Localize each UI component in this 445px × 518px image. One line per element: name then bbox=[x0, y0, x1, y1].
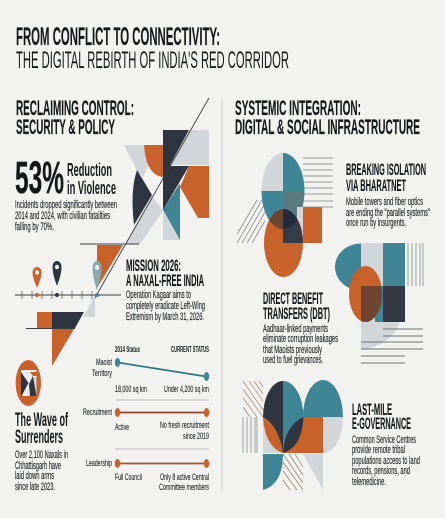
row: recruitment: since 2019 bbox=[183, 431, 209, 442]
row: leadership: Leadership bbox=[86, 458, 112, 469]
heading: systemic integration bbox=[235, 96, 420, 139]
row: maoist territory: 18,000 sq km bbox=[115, 384, 147, 395]
row: leadership: Only 8 active Central bbox=[160, 472, 209, 483]
panel: security and policy: RECLAIMING CONTROL: bbox=[16, 96, 134, 120]
row: maoist territory bbox=[92, 357, 209, 395]
block: direct benefit transfers bbox=[263, 290, 338, 366]
block: wave of surrenders: Chhattisgarh have bbox=[15, 460, 61, 472]
timeline with map pins bbox=[15, 261, 121, 299]
panel: digital and social infrastructure bbox=[232, 96, 430, 490]
row: recruitment bbox=[83, 407, 209, 442]
icon: blue-grey pin bbox=[92, 261, 102, 290]
text: violence details: 2014 and 2024, with civilian fatalities bbox=[15, 210, 110, 222]
block: wave of surrenders: since late 2023. bbox=[15, 481, 55, 493]
row: maoist territory: Under 4,200 sq km bbox=[164, 384, 209, 395]
block: direct benefit transfers: eliminate corruption leakages bbox=[263, 333, 338, 345]
heading: reclaiming control bbox=[16, 96, 134, 139]
block: last-mile e-governance: telemedicine. bbox=[352, 476, 386, 488]
panel: digital and social infrastructure: TRANSFERS (DBT) bbox=[263, 305, 330, 323]
block: wave of surrenders: laid down arms bbox=[15, 470, 54, 482]
row: leadership: Full Council bbox=[115, 472, 142, 483]
text: A NAXAL-FREE INDIA bbox=[126, 272, 204, 290]
text: violence details bbox=[15, 199, 117, 233]
row: maoist territory: Maoist bbox=[96, 357, 112, 368]
row: recruitment: Active bbox=[115, 422, 129, 433]
block: mission 2026 bbox=[126, 257, 205, 323]
chart: status comparison bbox=[83, 345, 209, 493]
illustration: lower geometric blocks bbox=[26, 297, 95, 366]
panel: security and policy bbox=[15, 96, 209, 493]
icon: surrender badge bbox=[16, 360, 41, 406]
chart headers: 2014 Status bbox=[115, 345, 140, 354]
stat: 53% reduction in violence: in Violence bbox=[67, 177, 116, 198]
block: mission 2026: MISSION 2026: bbox=[126, 257, 181, 275]
illustration: BharatNet collage bbox=[232, 153, 333, 277]
block: mission 2026: Operation Kagaar aims to bbox=[126, 289, 191, 301]
illustration: geometric collage bbox=[80, 98, 209, 317]
chart headers: CURRENT STATUS bbox=[171, 345, 209, 354]
block: direct benefit transfers: DIRECT BENEFIT bbox=[263, 290, 323, 308]
heading: reclaiming control: SECURITY & POLICY bbox=[16, 115, 115, 139]
row: leadership bbox=[86, 458, 209, 493]
illustration: DBT collage bbox=[335, 243, 423, 363]
block: BharatNet bbox=[346, 161, 430, 229]
block: wave of surrenders bbox=[15, 410, 68, 493]
block: mission 2026: completely eradicate Left-Wing bbox=[126, 300, 205, 312]
block: last-mile e-governance: LAST-MILE bbox=[352, 401, 392, 419]
stat: 53% reduction in violence: 53% bbox=[15, 152, 64, 203]
text: violence details: Incidents dropped significantly between bbox=[15, 199, 117, 211]
block: direct benefit transfers: Aadhaar-linked payments bbox=[263, 323, 328, 335]
stat: 53% reduction in violence: Reduction bbox=[67, 159, 112, 180]
row: leadership: Committee members bbox=[159, 482, 209, 493]
chart headers bbox=[115, 345, 209, 354]
block: direct benefit transfers: used to fuel grievances. bbox=[263, 354, 323, 366]
row: recruitment: Recruitment bbox=[83, 407, 112, 418]
row: maoist territory: Territory bbox=[92, 368, 112, 379]
illustration: e-governance collage bbox=[243, 380, 343, 490]
block: wave of surrenders: Surrenders bbox=[15, 427, 63, 448]
icon: dark pin bbox=[52, 261, 62, 286]
row: recruitment: No fresh recruitment bbox=[160, 420, 209, 431]
block: direct benefit transfers: that Maoists previously bbox=[263, 344, 322, 356]
icon: orange pin bbox=[32, 267, 42, 288]
panel: security and policy: The Wave of bbox=[15, 410, 68, 431]
block: last-mile e-governance bbox=[352, 401, 420, 488]
text: violence details: falling by 70%. bbox=[15, 221, 54, 233]
block: wave of surrenders: Over 2,100 Naxals in bbox=[15, 449, 68, 461]
title bbox=[16, 23, 289, 74]
block: mission 2026: Extremism by March 31, 2026. bbox=[126, 311, 204, 323]
